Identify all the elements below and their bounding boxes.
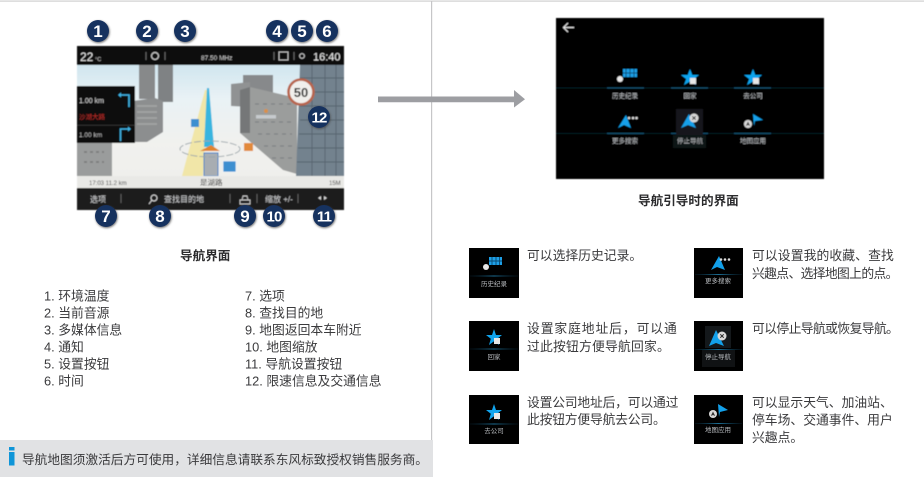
heading: navigation screen: 导航界面 (180, 248, 230, 263)
item: more search: 可以设置我的收藏、查找 (752, 248, 894, 263)
trip info strip: 15M (329, 181, 341, 187)
item: stop navigation (694, 321, 898, 371)
menu labels: 更多搜索 (612, 136, 638, 145)
item: more search (694, 248, 898, 298)
item: map apps: 地图应用 (705, 425, 731, 434)
icon: history (617, 69, 637, 82)
legend list right (245, 288, 382, 388)
item: go home: 设置家庭地址后，可以通 (527, 321, 678, 336)
item: history (469, 248, 642, 298)
item: go home (469, 321, 678, 371)
legend list left: 2. 当前音源 (44, 306, 110, 320)
number badges: 3 (180, 22, 190, 41)
status bar: 16:40 (313, 52, 341, 64)
trip info strip: 是湖路 (200, 177, 223, 187)
item: go to office: 此按钮方便导航去公司。 (527, 412, 666, 427)
item: go to office: 去公司 (484, 426, 504, 435)
bottom menu bar (77, 188, 344, 210)
number badges: 12 (311, 110, 327, 126)
heading: guidance screen: 导航引导时的界面 (638, 193, 739, 208)
speed limit sign: 50 (294, 85, 308, 100)
number badges: 9 (240, 207, 250, 226)
trip info strip (77, 176, 344, 188)
legend list left: 6. 时间 (44, 374, 84, 388)
number badges: 1 (93, 22, 103, 41)
status bar: °C (95, 57, 101, 63)
status bar: 22 (80, 50, 94, 64)
bottom menu bar: 选项 (90, 194, 106, 204)
item: stop navigation: 可以停止导航或恢复导航。 (752, 321, 898, 336)
number badges (87, 20, 338, 227)
number badges: 8 (155, 207, 165, 226)
note bar (0, 440, 433, 477)
legend list left: 1. 环境温度 (44, 288, 110, 304)
arrow (378, 90, 525, 108)
turn guidance panel (77, 86, 135, 143)
number badges: 5 (297, 22, 307, 41)
legend list right: 9. 地图返回本车附近 (245, 322, 362, 338)
legend list right: 11. 导航设置按钮 (245, 356, 342, 372)
item: map apps (694, 395, 893, 445)
note bar: 导航地图须激活后方可使用，详细信息请联系东风标致授权销售服务商。 (22, 452, 428, 467)
item: go home: 回家 (488, 352, 501, 361)
item: more search: 更多搜索 (705, 276, 732, 285)
item: go to office (469, 395, 679, 444)
bottom menu bar: 缩放 +/- (265, 194, 293, 204)
panel: navigation screen (77, 46, 344, 210)
item: map apps: 兴趣点。 (752, 430, 803, 445)
menu labels: 地图应用 (740, 136, 766, 145)
menu labels: 回家 (684, 91, 697, 100)
icon: go to office (744, 69, 762, 85)
turn guidance panel: 1.00 km (79, 132, 102, 139)
status bar: 87.50 MHz (201, 55, 232, 62)
item: go home: 过此按钮方便导航回家。 (527, 339, 670, 354)
menu labels (612, 91, 766, 145)
menu labels: 历史纪录 (612, 91, 638, 100)
item: stop navigation: 停止导航 (705, 352, 732, 361)
item: history: 历史纪录 (481, 279, 508, 288)
turn guidance panel: 沙湖大路 (79, 112, 106, 121)
icon: map apps (744, 114, 763, 128)
map: 3D buildings (77, 65, 344, 176)
status bar (77, 46, 344, 65)
legend list right: 10. 地图缩放 (245, 340, 318, 354)
icon: go home (681, 69, 699, 85)
legend list left: 3. 多媒体信息 (44, 322, 122, 338)
icon: stop navigation (681, 114, 698, 128)
turn guidance panel: 1.00 km (79, 98, 104, 105)
menu labels: 停止导航 (677, 136, 704, 145)
item: map apps: 停车场、交通事件、用户 (752, 412, 893, 428)
number badges: 6 (322, 22, 332, 41)
trip info strip: 17:03 11.2 km (89, 181, 127, 187)
legend list right: 7. 选项 (245, 288, 285, 304)
item: go to office: 设置公司地址后，可以通过 (527, 395, 679, 410)
legend list left: 4. 通知 (44, 340, 84, 354)
number badges: 7 (101, 207, 111, 226)
number badges: 2 (142, 22, 152, 41)
item: more search: 兴趣点、选择地图上的点。 (752, 266, 898, 281)
bottom menu bar: 查找目的地 (164, 194, 204, 204)
legend list right: 12. 限速信息及交通信息 (245, 374, 382, 388)
icon: more search (618, 115, 638, 128)
item: map apps: 可以显示天气、加油站、 (752, 395, 893, 410)
map: route lane (180, 88, 253, 176)
legend list left: 5. 设置按钮 (44, 356, 110, 372)
item: history: 可以选择历史记录。 (527, 248, 642, 263)
number badges: 11 (317, 208, 332, 226)
back arrow (564, 23, 574, 32)
speed limit sign (288, 80, 314, 104)
panel: guidance menu screen (556, 18, 824, 179)
number badges: 10 (266, 208, 282, 226)
legend list left (44, 288, 122, 388)
legend list right: 8. 查找目的地 (245, 306, 323, 320)
menu labels: 去公司 (743, 91, 763, 100)
number badges: 4 (272, 22, 282, 41)
